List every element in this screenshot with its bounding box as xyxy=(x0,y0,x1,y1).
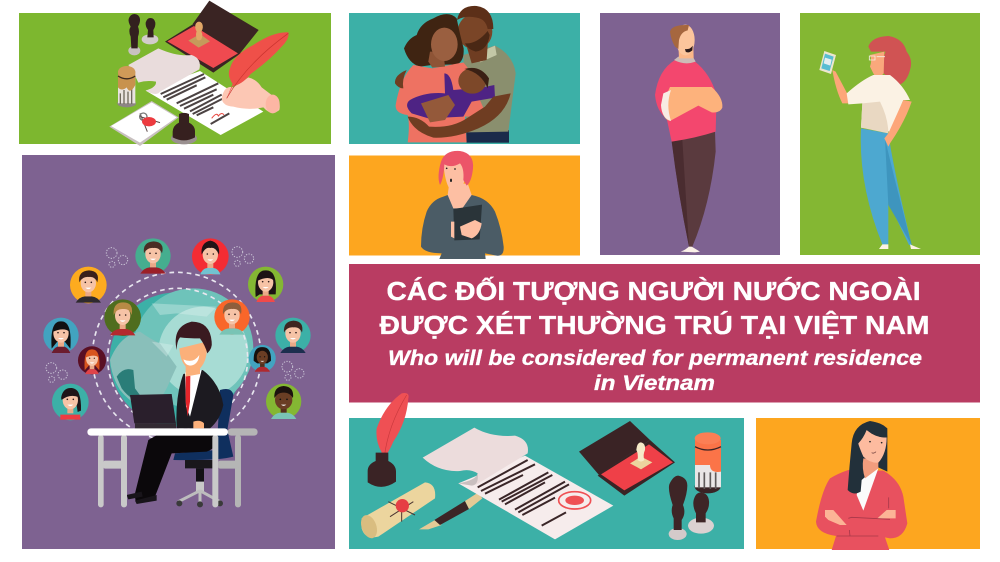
avatar: dark-skinned woman on blue xyxy=(249,345,276,372)
avatar: man on bright orange xyxy=(214,299,250,335)
panel: woman with tablet on orange xyxy=(349,151,580,259)
title: ĐƯỢC XÉT THƯỜNG TRÚ TẠI VIỆT NAM xyxy=(380,310,930,340)
document text lines xyxy=(478,460,569,526)
suit jacket xyxy=(176,370,223,428)
icon: ink bottle xyxy=(171,113,197,144)
long red hair xyxy=(868,36,911,86)
hand xyxy=(193,421,204,428)
shoes xyxy=(879,244,921,249)
collar xyxy=(674,57,696,63)
illustration: woman holding phone xyxy=(819,36,921,249)
head xyxy=(179,342,207,377)
dashed orbit circles xyxy=(92,272,261,441)
raised arm xyxy=(832,70,848,103)
illustration: dark-haired woman in red blazer xyxy=(816,421,907,550)
illustration: man with crossed arms xyxy=(655,25,722,252)
avatar: woman on green xyxy=(248,267,283,302)
white top xyxy=(857,468,878,511)
icon: tall wax stamp xyxy=(128,14,140,55)
panel: title banner xyxy=(349,264,980,402)
avatar: man on olive xyxy=(104,299,141,336)
avatar: woman on red xyxy=(192,238,229,275)
icon: open ink pad with stamp xyxy=(579,421,675,496)
face and neck xyxy=(858,422,887,478)
shirt and tie xyxy=(185,370,202,417)
icon: open ink pad with stamp xyxy=(165,1,259,73)
laptop xyxy=(130,394,176,423)
subtitle xyxy=(388,347,922,395)
icon: quill feather xyxy=(376,393,409,457)
icon: red feather xyxy=(227,32,289,98)
panel: employee and global network on purple xyxy=(22,155,335,549)
icon: signature stroke xyxy=(212,114,224,118)
icon: envelope with wax seal xyxy=(109,101,179,146)
hands on tablet xyxy=(451,220,482,238)
icon: ink bottle xyxy=(368,453,396,487)
shoes xyxy=(681,246,700,252)
illustration: red-haired woman holding tablet xyxy=(421,151,504,259)
face and neck xyxy=(870,52,884,80)
tablet xyxy=(453,205,482,240)
icon: document with curled top xyxy=(423,428,613,539)
red seal on document xyxy=(559,492,591,509)
icon: curled paper and document xyxy=(128,48,263,135)
avatar: woman on blue xyxy=(43,318,79,353)
text lines on the document xyxy=(161,74,229,124)
small gear decorations xyxy=(46,247,304,382)
illustration: quill signing a document xyxy=(109,1,289,146)
mother's face xyxy=(428,28,458,68)
avatar: dark-skinned man on green xyxy=(266,384,301,419)
avatar: woman on teal lower left xyxy=(52,384,89,420)
crossed hands and arms xyxy=(825,497,896,536)
icon: rolled scroll with seal xyxy=(358,482,435,540)
woman's neck xyxy=(448,183,472,208)
father's shirt and trousers xyxy=(463,46,516,143)
avatar: man on green-teal xyxy=(135,238,171,274)
woman's grey jacket xyxy=(421,195,504,259)
baby's head xyxy=(458,68,489,94)
icon: fountain pen xyxy=(419,492,482,529)
eyes and mouth xyxy=(446,167,456,182)
avatar: man on teal xyxy=(275,318,311,353)
icon: short wax stamp xyxy=(142,18,158,44)
icon: tall wax stamp xyxy=(669,476,687,540)
globe xyxy=(110,288,253,426)
crossed arms xyxy=(661,87,722,121)
neck and head xyxy=(670,25,695,58)
illustration: documents, stamps and quill xyxy=(358,393,721,540)
mother's hand cradling baby xyxy=(421,95,455,122)
mother's curly hair xyxy=(404,14,464,67)
illustration: businessman with globe and people xyxy=(43,238,311,507)
woman's red hair xyxy=(439,151,473,186)
subtitle: Who will be considered for permanent residence xyxy=(388,347,922,370)
father's arm xyxy=(408,93,511,138)
panel: woman with crossed arms on orange xyxy=(756,418,980,550)
panel: legal documents on teal xyxy=(349,393,744,549)
panel: document signing on green xyxy=(19,1,331,146)
avatars ring xyxy=(43,238,311,420)
father's head xyxy=(457,6,493,63)
panel: standing man on purple xyxy=(600,13,780,255)
office chair xyxy=(173,389,233,507)
blouse xyxy=(847,75,910,132)
legs and shoes xyxy=(135,433,217,503)
father's left hand xyxy=(395,70,407,88)
woman's face xyxy=(443,162,465,190)
icon: short wax stamp xyxy=(688,492,714,534)
panel: family on teal xyxy=(349,6,580,144)
avatar: man on orange xyxy=(70,267,107,303)
illustration: parents holding baby xyxy=(395,6,516,143)
glasses xyxy=(869,56,885,60)
subtitle: in Vietnam xyxy=(594,372,715,395)
baby's purple outfit xyxy=(407,73,495,118)
desk xyxy=(87,428,258,507)
phone in hand xyxy=(819,51,836,74)
pink sweater xyxy=(655,60,717,142)
icon: seal jar xyxy=(117,66,136,107)
mother's dress xyxy=(396,62,485,142)
trousers xyxy=(672,132,716,247)
title: CÁC ĐỐI TƯỢNG NGƯỜI NƯỚC NGOÀI xyxy=(386,276,920,306)
avatar: woman on maroon xyxy=(78,346,106,374)
icon: writing hand xyxy=(222,77,280,113)
panel: woman with phone on green xyxy=(800,13,980,255)
hand on hip xyxy=(884,100,912,147)
businessman xyxy=(127,322,223,504)
icon: ink stamp jar xyxy=(695,432,721,493)
long black hair xyxy=(848,421,887,493)
title xyxy=(380,276,930,340)
blazer xyxy=(816,470,907,550)
left pant leg xyxy=(861,128,912,245)
